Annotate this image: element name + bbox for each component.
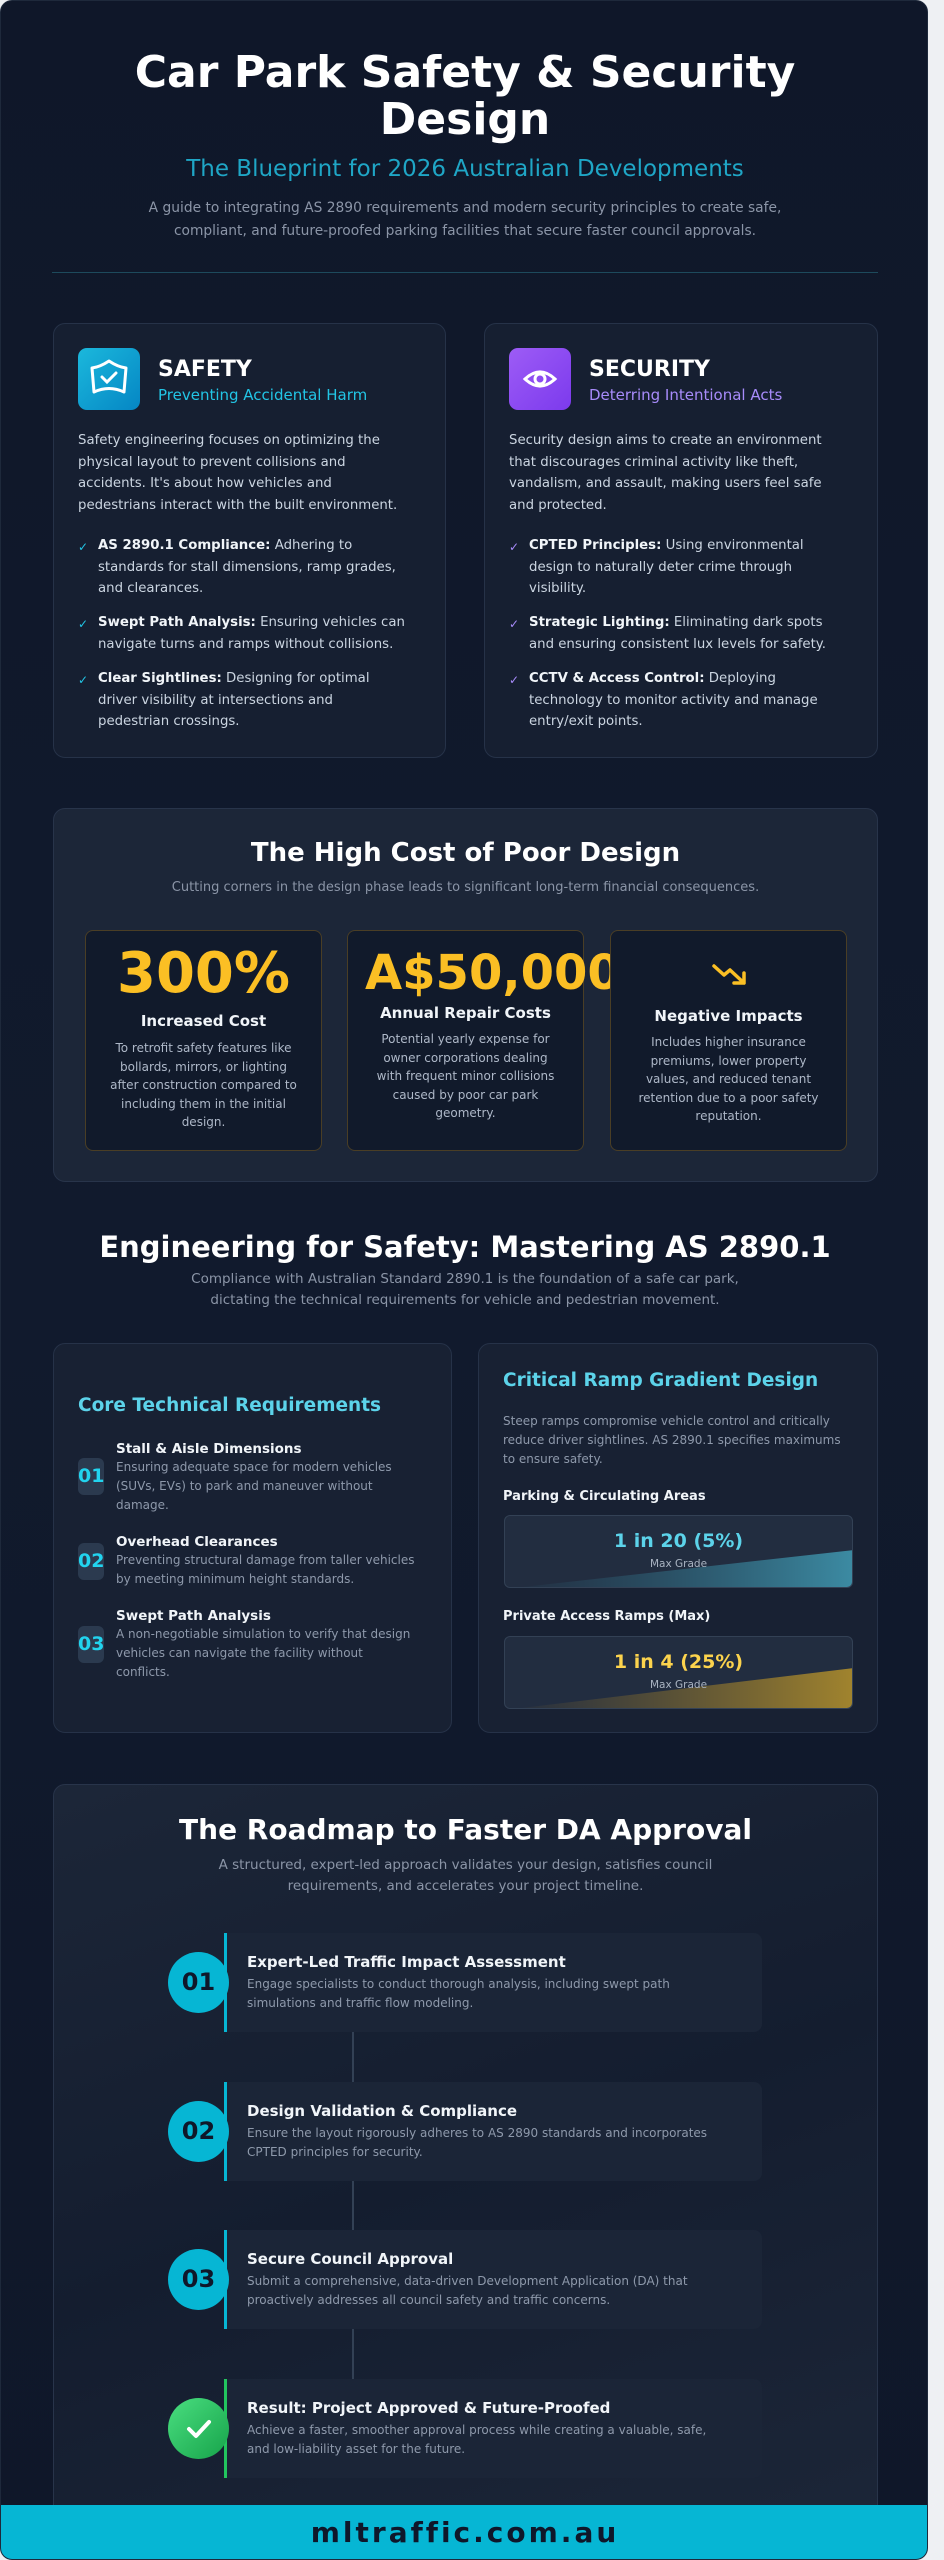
item 03 [78, 1608, 410, 1679]
heading: The Roadmap to Faster DA Approval [179, 1813, 752, 1846]
subheading [218, 1857, 712, 1894]
description: pedestrians interact with the built environment. [78, 498, 397, 512]
heading: Critical Ramp Gradient Design [503, 1370, 818, 1391]
item 03: Swept Path Analysis [116, 1608, 271, 1624]
description [509, 433, 822, 512]
item 02: Overhead Clearances [116, 1534, 278, 1550]
item 02: 02 [78, 1550, 104, 1572]
bullet list [78, 538, 405, 729]
step 04: result [168, 2379, 706, 2478]
bullet list [509, 538, 826, 729]
bullet list: ✓ [509, 617, 519, 631]
subheading: A structured, expert-led approach validates your design, satisfies council [219, 1857, 712, 1873]
gradient bar: 1 in 4: 1 in 4 (25%) [614, 1651, 743, 1673]
subheading: engineering: dictating the technical requirements for vehicle and pedestrian movement. [210, 1292, 720, 1308]
subheading: Preventing Accidental Harm [158, 386, 367, 404]
subheading: engineering [191, 1271, 739, 1308]
bullet list: and ensuring consistent lux levels for safety. [529, 636, 826, 652]
subheading: Cutting corners in the design phase leads to significant long-term financial consequences. [172, 880, 759, 895]
stat: 300%: design. [182, 1115, 225, 1129]
step 02: 02 [182, 2117, 215, 2145]
stat: 300%: 300% [117, 941, 290, 1006]
title [135, 47, 795, 145]
stat: A$50,000: caused by poor car park [393, 1088, 538, 1102]
heading: engineering: Engineering for Safety: Mastering AS 2890.1 [99, 1230, 831, 1264]
intro text: compliant, and future-proofed parking facilities that secure faster council approvals. [174, 223, 756, 239]
gradient bar: 1 in 4 [504, 1636, 853, 1709]
step 04: result: and low-liability asset for the future. [247, 2442, 465, 2456]
heading: The High Cost of Poor Design [251, 838, 680, 868]
step 01 [168, 1933, 670, 2032]
gradient bar: 1 in 4: Max Grade [650, 1679, 707, 1691]
description: accidents. It's about how vehicles and [78, 476, 332, 491]
panel: core requirements [53, 1343, 452, 1733]
step 02 [168, 2082, 707, 2181]
bullet list: pedestrian crossings. [98, 714, 240, 729]
stat: 300%: bollards, mirrors, or lighting [120, 1060, 287, 1074]
stat: 300% [85, 930, 322, 1151]
description: physical layout to prevent collisions and [78, 454, 346, 470]
step 03: proactively addresses all council safety and traffic concerns. [247, 2293, 610, 2307]
stat: A$50,000: owner corporations dealing [383, 1050, 548, 1064]
stat: A$50,000: Potential yearly expense for [381, 1032, 550, 1046]
icon: eye [509, 348, 571, 410]
bullet list: visibility. [529, 581, 586, 596]
step 03: Secure Council Approval [247, 2250, 453, 2268]
description: Security design aims to create an environment [509, 433, 822, 448]
title: Design [380, 94, 550, 145]
description [503, 1414, 841, 1466]
bullet list: Swept Path Analysis: Ensuring vehicles can [98, 615, 405, 630]
item 01: Ensuring adequate space for modern vehicles [116, 1460, 392, 1474]
item 02 [78, 1534, 414, 1586]
subtitle: The Blueprint for 2026 Australian Developments [186, 156, 744, 182]
stat: 300%: after construction compared to [110, 1078, 297, 1092]
bullet list: Strategic Lighting: Eliminating dark spots [529, 615, 823, 630]
description: vandalism, and assault, making users feel safe [509, 476, 822, 491]
step 03 [168, 2230, 688, 2329]
bullet list: AS 2890.1 Compliance: Adhering to [98, 538, 352, 553]
bullet list: ✓ [509, 540, 519, 554]
stat: negative impacts: retention due to a poor safety [638, 1090, 819, 1104]
stat: 300%: To retrofit safety features like [115, 1041, 292, 1055]
bullet list: standards for stall dimensions, ramp grades, [98, 560, 396, 574]
item 03: conflicts. [116, 1665, 170, 1679]
bullet list: ✓ [509, 673, 519, 687]
label: parking areas: Parking & Circulating Areas [503, 1489, 706, 1504]
bullet list: navigate turns and ramps without collisions. [98, 636, 393, 652]
bullet list: driver visibility at intersections and [98, 692, 333, 708]
item 01: (SUVs, EVs) to park and maneuver without [116, 1479, 373, 1493]
description [78, 433, 397, 512]
heading: SECURITY [589, 357, 710, 382]
stat: 300%: including them in the initial [121, 1096, 286, 1110]
item 02: Preventing structural damage from taller vehicles [116, 1553, 414, 1567]
item 01 [78, 1441, 392, 1512]
item 01: damage. [116, 1498, 169, 1512]
panel: roadmap [53, 1784, 878, 2544]
item 02: by meeting minimum height standards. [116, 1572, 354, 1586]
bullet list: ✓ [78, 540, 88, 554]
step 02: CPTED principles for security. [247, 2145, 423, 2159]
item 01: 01 [78, 1465, 104, 1487]
stat: negative impacts: Negative Impacts [654, 1007, 803, 1025]
step 01: Engage specialists to conduct thorough analysis, including swept path [247, 1977, 670, 1991]
subheading: requirements, and accelerates your project timeline. [288, 1878, 643, 1894]
step 01: 01 [182, 1968, 215, 1996]
intro text: A guide to integrating AS 2890 requirements and modern security principles to create safe, [149, 200, 781, 216]
item 03: 03 [78, 1633, 104, 1655]
heading: SAFETY [158, 357, 252, 382]
stat: A$50,000 [347, 930, 584, 1151]
icon: shield check [78, 348, 140, 410]
description: to ensure safety. [503, 1452, 603, 1466]
gradient bar: 1 in 20 [504, 1515, 853, 1588]
label: private ramps: Private Access Ramps (Max) [503, 1609, 710, 1624]
item 01: Stall & Aisle Dimensions [116, 1441, 302, 1457]
icon: trending down [712, 964, 746, 985]
stat: A$50,000: geometry. [435, 1106, 496, 1120]
step 01: simulations and traffic flow modeling. [247, 1996, 473, 2010]
bullet list: CCTV & Access Control: Deploying [529, 671, 776, 686]
description: Steep ramps compromise vehicle control and critically [503, 1414, 830, 1428]
bullet list: Clear Sightlines: Designing for optimal [98, 671, 370, 686]
bullet list: design to naturally deter crime through [529, 560, 792, 574]
stat: negative impacts: premiums, lower property [651, 1054, 806, 1068]
bullet list: ✓ [78, 673, 88, 687]
stat: negative impacts: Includes higher insurance [651, 1035, 806, 1049]
bullet list: CPTED Principles: Using environmental [529, 538, 804, 553]
stat: negative impacts: values, and reduced tenant [646, 1072, 811, 1086]
item 03: A non-negotiable simulation to verify that design [116, 1627, 410, 1641]
description: Safety engineering focuses on optimizing the [78, 433, 380, 448]
footer: mltraffic.com.au [311, 2516, 619, 2549]
stat: A$50,000: A$50,000 [365, 945, 621, 1001]
panel: high cost [53, 808, 878, 1182]
panel: safety [53, 323, 446, 758]
item 03: vehicles can navigate the facility without [116, 1646, 363, 1660]
title: Car Park Safety & Security [135, 47, 795, 98]
stat: A$50,000: Annual Repair Costs [380, 1004, 551, 1022]
subheading: engineering: Compliance with Australian Standard 2890.1 is the foundation of a safe car park, [191, 1271, 739, 1287]
step 02: Design Validation & Compliance [247, 2102, 517, 2120]
step 04: result: Result: Project Approved & Future-Proofed [247, 2399, 610, 2417]
stat: negative impacts: reputation. [695, 1109, 762, 1123]
stat: 300%: Increased Cost [141, 1012, 266, 1030]
gradient bar: 1 in 20: 1 in 20 (5%) [614, 1530, 743, 1552]
subheading: Deterring Intentional Acts [589, 386, 782, 404]
panel: ramp gradient [478, 1343, 878, 1733]
stat: negative impacts [610, 930, 847, 1151]
step 02: Ensure the layout rigorously adheres to AS 2890 standards and incorporates [247, 2126, 707, 2140]
step 03: 03 [182, 2265, 215, 2293]
bullet list: ✓ [78, 617, 88, 631]
intro text [148, 200, 781, 239]
step 01: Expert-Led Traffic Impact Assessment [247, 1953, 566, 1971]
panel: security [484, 323, 878, 758]
bullet list: entry/exit points. [529, 714, 643, 729]
description: reduce driver sightlines. AS 2890.1 specifies maximums [503, 1433, 841, 1447]
step 04: result: Achieve a faster, smoother approval process while creating a valuable, safe, [247, 2423, 706, 2437]
bullet list: and clearances. [98, 581, 203, 596]
description: and protected. [509, 498, 607, 512]
bullet list: technology to monitor activity and manage [529, 692, 818, 708]
heading: Core Technical Requirements [78, 1395, 381, 1416]
description: that discourages criminal activity like theft, [509, 454, 798, 470]
stat: A$50,000: with frequent minor collisions [377, 1069, 554, 1083]
gradient bar: 1 in 20: Max Grade [650, 1558, 707, 1570]
step 03: Submit a comprehensive, data-driven Development Application (DA) that [247, 2274, 688, 2288]
footer [1, 2505, 929, 2560]
